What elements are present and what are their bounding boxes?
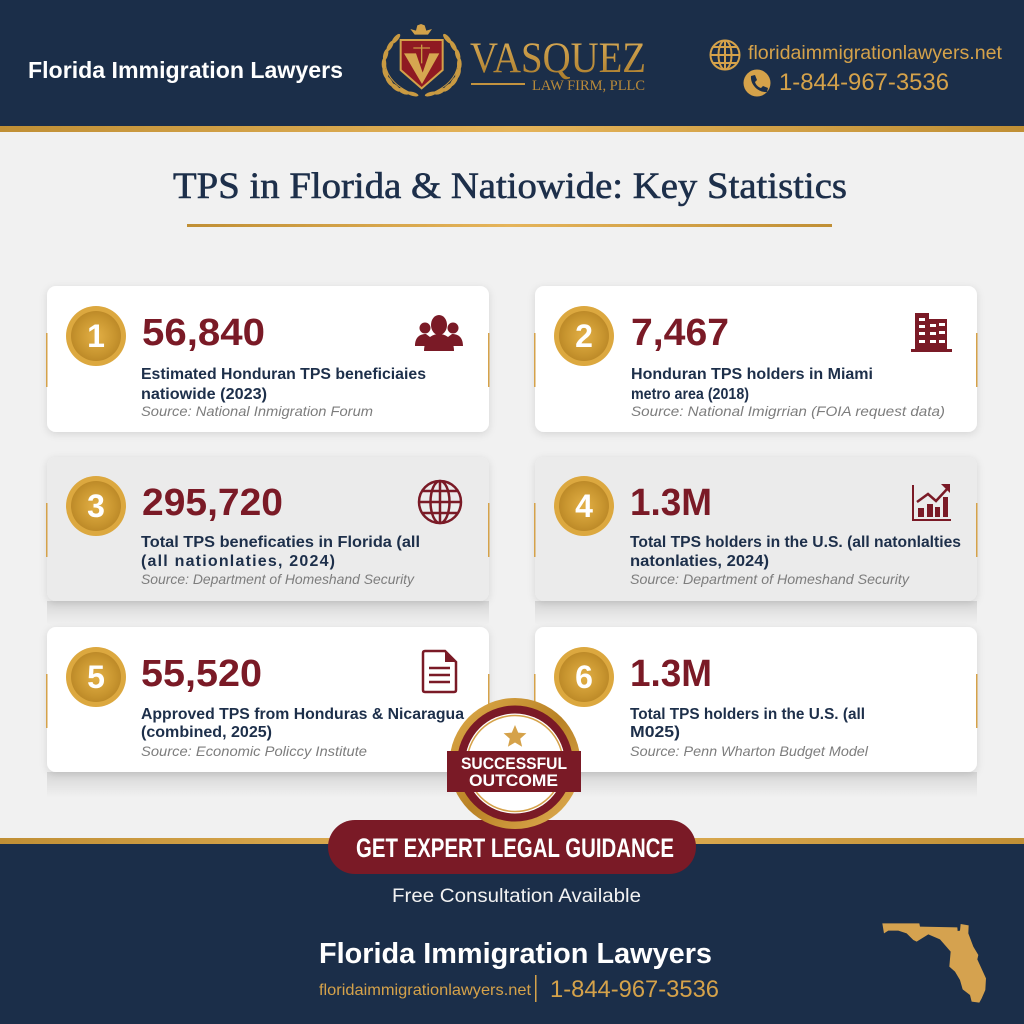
header band: [0, 0, 1024, 132]
panel: stat 1: [46, 286, 490, 432]
header contact: [710, 40, 1003, 96]
description 2: [631, 366, 873, 403]
source 3: Source: Department of Homeshand Security: [141, 571, 415, 587]
footer contact: floridaimmigrationlawyers.net: [319, 982, 532, 999]
source 6: Source: Penn Wharton Budget Model: [630, 743, 869, 759]
seal text: [461, 755, 567, 790]
number badge 3: 3: [87, 488, 105, 524]
panel: stat 4: [534, 457, 978, 625]
icon: shield V: [404, 53, 439, 84]
number badge 5: [66, 647, 126, 707]
title: TPS in Florida & Natiowide: Key Statistics: [173, 166, 847, 207]
header firm name: Florida Immigration Lawyers: [28, 57, 343, 83]
icon: growth chart: [913, 484, 951, 520]
number badge 5: 5: [87, 659, 105, 695]
panel: stat 6: [534, 627, 978, 798]
call to action button: [328, 820, 696, 874]
source 1: Source: National Inmigration Forum: [141, 403, 373, 419]
logo: Vasquez Law Firm: [381, 24, 646, 97]
icon: header globe: [710, 40, 740, 70]
description 2: Honduran TPS holders in Miami: [631, 366, 873, 383]
footer firm name: Florida Immigration Lawyers: [319, 938, 712, 970]
value 1: 56,840: [142, 312, 265, 354]
description 1: natiowide (2023): [141, 386, 267, 403]
description 4: natonlaties, 2024): [630, 553, 769, 570]
header contact: 1-844-967-3536: [779, 69, 949, 96]
description 6: Total TPS holders in the U.S. (all: [630, 706, 865, 723]
description 3: [141, 534, 420, 570]
icon: scales: [413, 45, 430, 63]
icon: laurel wreath left: [381, 33, 419, 97]
description 4: [630, 534, 961, 570]
number badge 1: [66, 306, 126, 366]
value 3: 295,720: [142, 482, 283, 524]
call to action button: GET EXPERT LEGAL GUIDANCE: [356, 833, 674, 863]
description 5: (combined, 2025): [141, 724, 272, 741]
icon: globe: [419, 481, 461, 523]
footer band: [0, 838, 1024, 1024]
consultation note: Free Consultation Available: [392, 886, 641, 907]
number badge 1: 1: [87, 318, 105, 354]
title underline: [187, 224, 832, 227]
icon: Florida map: [882, 923, 986, 1003]
description 2: metro area (2018): [631, 386, 749, 403]
source 4: Source: Department of Homeshand Security: [630, 571, 910, 587]
footer contact: 1-844-967-3536: [550, 976, 719, 1003]
source 5: Source: Economic Policcy Institute: [141, 743, 367, 759]
panel: stat 2: [534, 286, 978, 432]
number badge 4: [554, 476, 614, 536]
icon: crown: [410, 24, 432, 35]
logo: Vasquez Law Firm: LAW FIRM, PLLC: [532, 78, 645, 94]
icon: building: [911, 313, 952, 352]
description 1: Estimated Honduran TPS beneficiaies: [141, 366, 426, 383]
number badge 4: 4: [575, 488, 593, 524]
value 2: 7,467: [631, 312, 729, 354]
icon: header phone: [744, 70, 770, 96]
panel: stat 5: [46, 627, 490, 798]
description 1: [141, 366, 426, 403]
seal: successful outcome: [447, 698, 581, 829]
icon: shield: [401, 40, 443, 88]
icon: laurel wreath right: [424, 33, 462, 97]
description 3: (all nationlaties, 2024): [141, 553, 335, 570]
number badge 2: 2: [575, 318, 593, 354]
seal text: SUCCESSFUL: [461, 755, 567, 773]
number badge 6: 6: [575, 659, 593, 695]
icon: people: [415, 315, 463, 351]
header contact: floridaimmigrationlawyers.net: [748, 42, 1003, 64]
seal ribbon: [447, 751, 581, 792]
description 6: M025): [630, 724, 680, 741]
description 6: [630, 706, 865, 741]
seal text: OUTCOME: [469, 772, 558, 790]
number badge 6: [554, 647, 614, 707]
icon: star: [504, 725, 526, 747]
value 6: 1.3M: [630, 653, 712, 695]
description 5: [141, 706, 464, 741]
description 5: Approved TPS from Honduras & Nicaragua: [141, 706, 464, 723]
value 5: 55,520: [141, 653, 262, 695]
panel: stat 3: [46, 457, 490, 625]
description 3: Total TPS beneficaties in Florida (all: [141, 534, 420, 551]
description 4: Total TPS holders in the U.S. (all natonlalties: [630, 534, 961, 551]
value 4: 1.3M: [630, 482, 712, 524]
logo: Vasquez Law Firm: VASQUEZ: [470, 35, 646, 82]
source 2: Source: National Imigrrian (FOIA request data): [631, 403, 945, 419]
icon: document: [423, 651, 456, 692]
number badge 2: [554, 306, 614, 366]
footer contact: [319, 975, 719, 1003]
number badge 3: [66, 476, 126, 536]
